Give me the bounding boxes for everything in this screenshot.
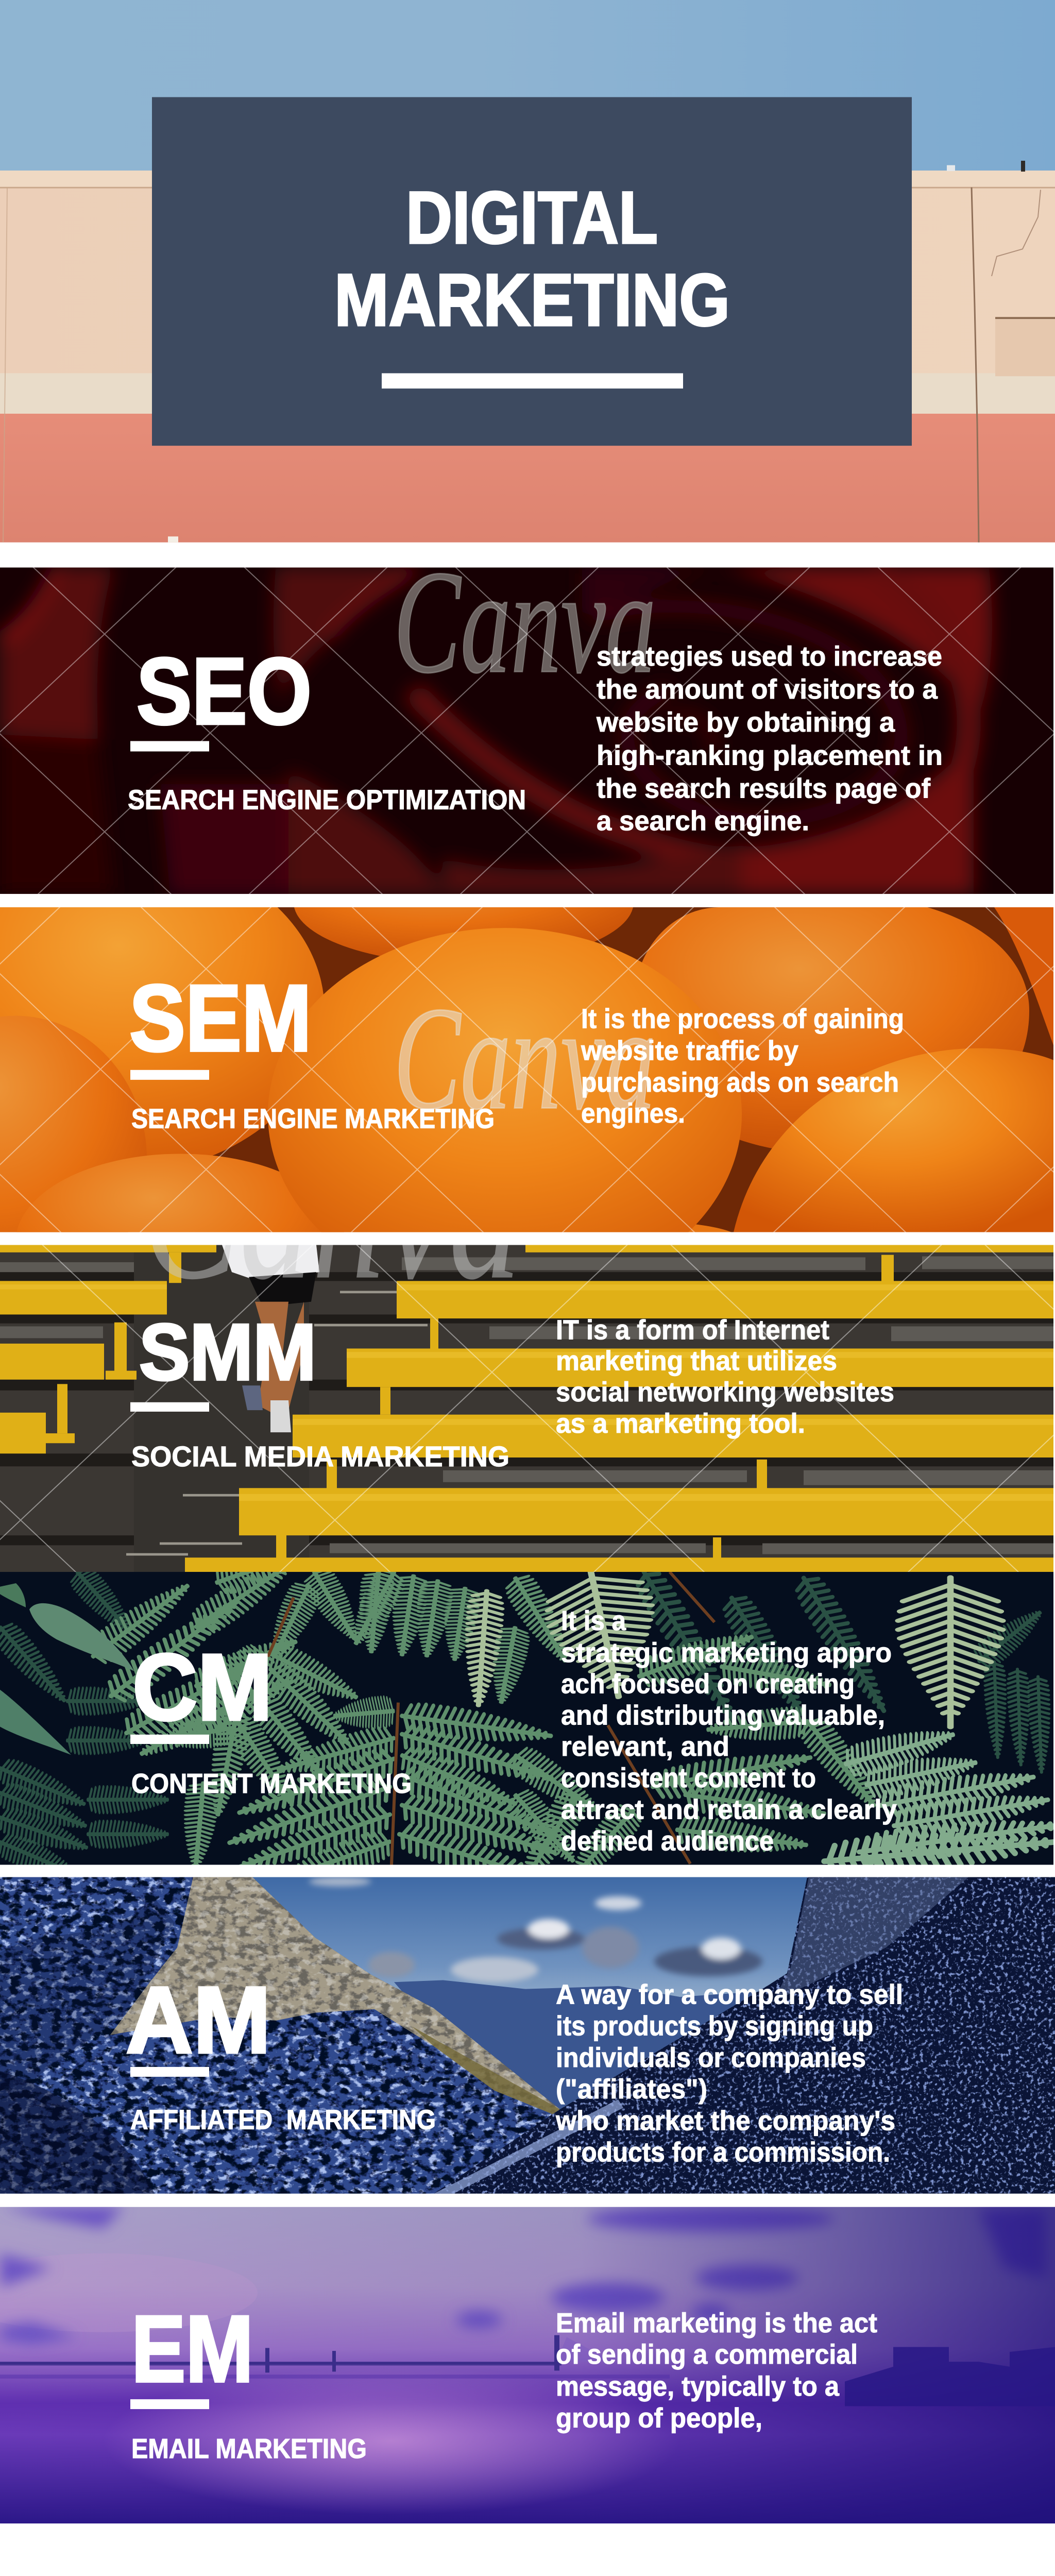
title underline — [382, 373, 683, 388]
panel: SEO — [0, 540, 1053, 894]
CM description: It is a — [561, 1605, 626, 1636]
AM subtitle: AFFILIATED MARKETING — [130, 2104, 436, 2135]
CM brown stems — [268, 1572, 714, 1865]
SMM canva watermark: Canva — [143, 1102, 521, 1320]
panel: EM — [0, 2206, 1055, 2523]
EM description: group of people, — [556, 2402, 762, 2433]
AM description: products for a commission. — [556, 2137, 890, 2167]
CM heading: CM — [132, 1634, 273, 1740]
SEM description: engines. — [581, 1097, 685, 1129]
SEO description — [596, 640, 943, 836]
CM subtitle: CONTENT MARKETING — [131, 1768, 412, 1799]
panel: SMM — [0, 1245, 1053, 1572]
AM rocky peak — [103, 1877, 567, 2124]
panel: hero header — [0, 0, 1055, 543]
EM purple bridge photo background — [0, 2206, 1055, 2523]
SMM heading: SMM — [139, 1308, 316, 1397]
AM description: who market the company's — [555, 2105, 895, 2136]
CM description: relevant, and — [561, 1731, 729, 1761]
SMM description: as a marketing tool. — [556, 1408, 805, 1439]
SEM oranges photo background — [0, 907, 1053, 1232]
title: marketing: MARKETING — [334, 258, 730, 341]
CM description: ach focused on creating — [561, 1668, 855, 1699]
SEO description: a search engine. — [597, 805, 809, 836]
SEM description: It is the process of gaining — [581, 1003, 904, 1034]
SMM description: social networking websites — [556, 1376, 894, 1407]
SEO canva watermark: Canva — [394, 540, 656, 704]
SEO underbar — [130, 741, 209, 752]
SEO description: the search results page of — [597, 773, 930, 804]
AM underbar — [130, 2067, 209, 2077]
title box — [152, 97, 912, 446]
EM underbar — [130, 2399, 209, 2409]
panel: SEM — [0, 907, 1053, 1232]
panel: CM — [0, 1536, 1055, 1895]
AM mountain photo background — [0, 1876, 1055, 2194]
SMM runner figure — [222, 1245, 319, 1432]
CM dark background fronds — [0, 1564, 1051, 1887]
SMM subtitle: SOCIAL MEDIA MARKETING — [131, 1440, 509, 1473]
CM description — [561, 1605, 897, 1856]
CM description: strategic marketing appro — [561, 1637, 892, 1668]
SEO description: website by obtaining a — [596, 706, 895, 738]
EM description — [556, 2307, 877, 2433]
CM underbar — [130, 1735, 209, 1744]
EM subtitle: EMAIL MARKETING — [131, 2433, 367, 2464]
CM pale hanging fronds — [462, 1562, 1002, 1727]
AM description: A way for a company to sell — [556, 1979, 903, 2010]
SEM underbar — [130, 1070, 209, 1080]
CM broad leaves — [0, 1583, 134, 1755]
AM description: ("affiliates") — [556, 2073, 707, 2105]
hero background photo — [0, 0, 1055, 543]
SEM description: purchasing ads on search — [581, 1066, 899, 1097]
AM description: individuals or companies — [556, 2042, 866, 2073]
EM description: Email marketing is the act — [556, 2307, 877, 2338]
AM heading: AM — [126, 1967, 271, 2073]
SEO description: strategies used to increase — [597, 640, 942, 671]
SEM description: website traffic by — [581, 1035, 798, 1066]
SEO description: high-ranking placement in — [597, 740, 943, 771]
SMM underbar — [130, 1402, 209, 1412]
SEM heading: SEM — [129, 965, 312, 1071]
SEO description: the amount of visitors to a — [597, 673, 938, 705]
SEO rose photo background — [0, 540, 1053, 894]
panel: AM — [0, 1876, 1055, 2194]
CM description: defined audience — [561, 1825, 774, 1856]
SEM subtitle: SEARCH ENGINE MARKETING — [131, 1103, 495, 1134]
EM heading: EM — [131, 2296, 253, 2402]
EM description: message, typically to a — [556, 2370, 840, 2402]
SEM description — [581, 1003, 904, 1129]
CM fern photo background — [0, 1536, 1055, 1895]
title: digital: DIGITAL — [406, 176, 658, 259]
SMM description: IT is a form of Internet — [556, 1314, 829, 1345]
CM light fronds at right — [823, 1720, 1055, 1879]
SEO subtitle: SEARCH ENGINE OPTIMIZATION — [128, 784, 526, 815]
AM description — [555, 1979, 903, 2167]
CM description: and distributing valuable, — [561, 1700, 885, 1731]
AM description: its products by signing up — [556, 2010, 873, 2041]
CM mid-green fronds — [83, 1536, 886, 1895]
EM description: of sending a commercial — [556, 2338, 858, 2369]
SMM description — [556, 1314, 894, 1439]
SMM description: marketing that utilizes — [556, 1345, 837, 1376]
CM description: consistent content to — [561, 1762, 816, 1793]
SEO heading: SEO — [137, 638, 312, 744]
SMM yellow stairs photo background — [0, 1102, 1053, 1572]
CM description: attract and retain a clearly — [561, 1794, 897, 1825]
SEM canva watermark: Canva — [394, 976, 656, 1140]
